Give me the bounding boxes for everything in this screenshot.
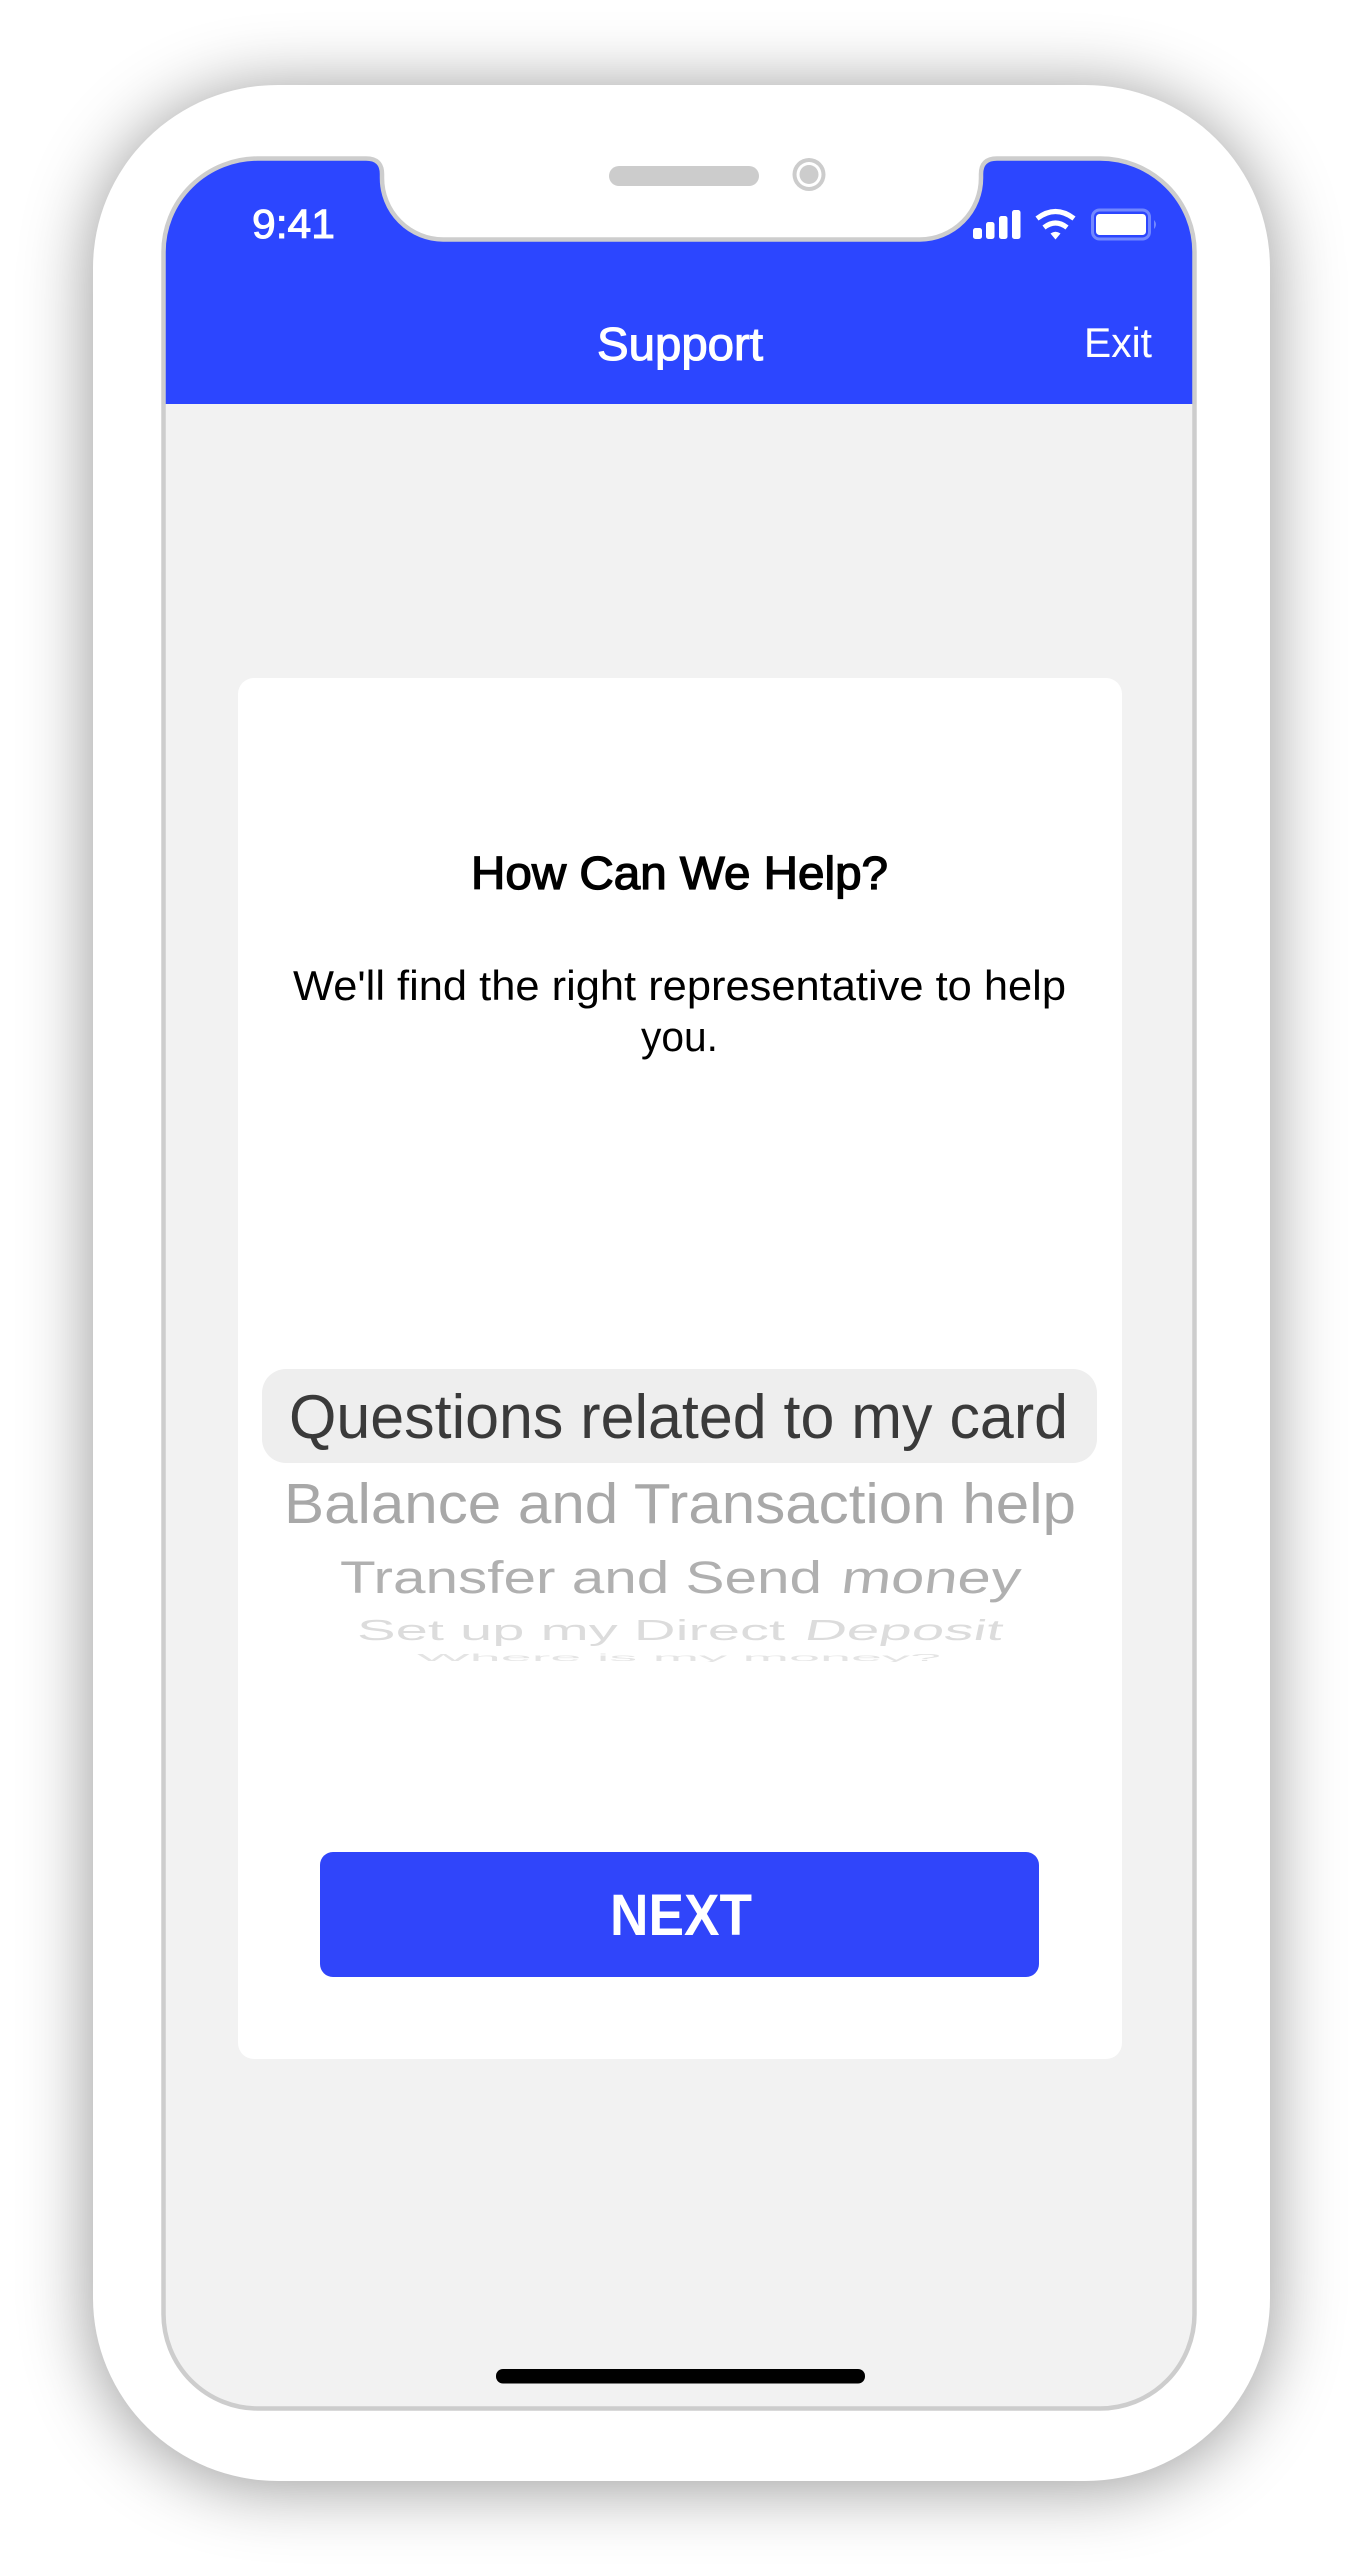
picker option: where is my money: Where is my money? — [417, 1652, 941, 1663]
screen background — [160, 150, 1200, 2415]
exit link: Exit — [1084, 319, 1152, 366]
picker option: transfer: money — [839, 1553, 1024, 1603]
camera — [792, 158, 826, 191]
picker option: direct deposit: Deposit — [802, 1614, 1007, 1646]
card description: you. — [641, 1013, 718, 1060]
status bar time: 9:41 — [252, 201, 335, 247]
screen outline with notch — [163, 158, 1194, 2408]
next button — [320, 1852, 1039, 1977]
icon: battery — [1092, 210, 1156, 239]
card description — [293, 962, 1066, 1060]
card description: We'll find the right representative to help — [293, 962, 1066, 1009]
icon: signal bars — [973, 210, 1020, 239]
phone screen illustration — [161, 156, 1197, 2411]
panel: help card — [238, 678, 1122, 2059]
picker option: card questions: Questions related to my card — [289, 1383, 1068, 1452]
picker selection highlight — [262, 1369, 1097, 1463]
picker option: transfer: Transfer and Send — [340, 1553, 822, 1603]
picker option: direct deposit: Set up my Direct — [357, 1614, 786, 1646]
picker option: balance: Balance and Transaction help — [284, 1472, 1076, 1536]
next button label: NEXT — [610, 1883, 752, 1948]
header title: Support — [597, 318, 763, 370]
card heading: How Can We Help? — [471, 847, 888, 899]
speaker grille — [609, 166, 759, 186]
picker option: transfer — [340, 1553, 1024, 1603]
icon: wifi — [1037, 212, 1074, 240]
picker option: direct deposit — [357, 1614, 1007, 1646]
home indicator — [496, 2369, 865, 2384]
